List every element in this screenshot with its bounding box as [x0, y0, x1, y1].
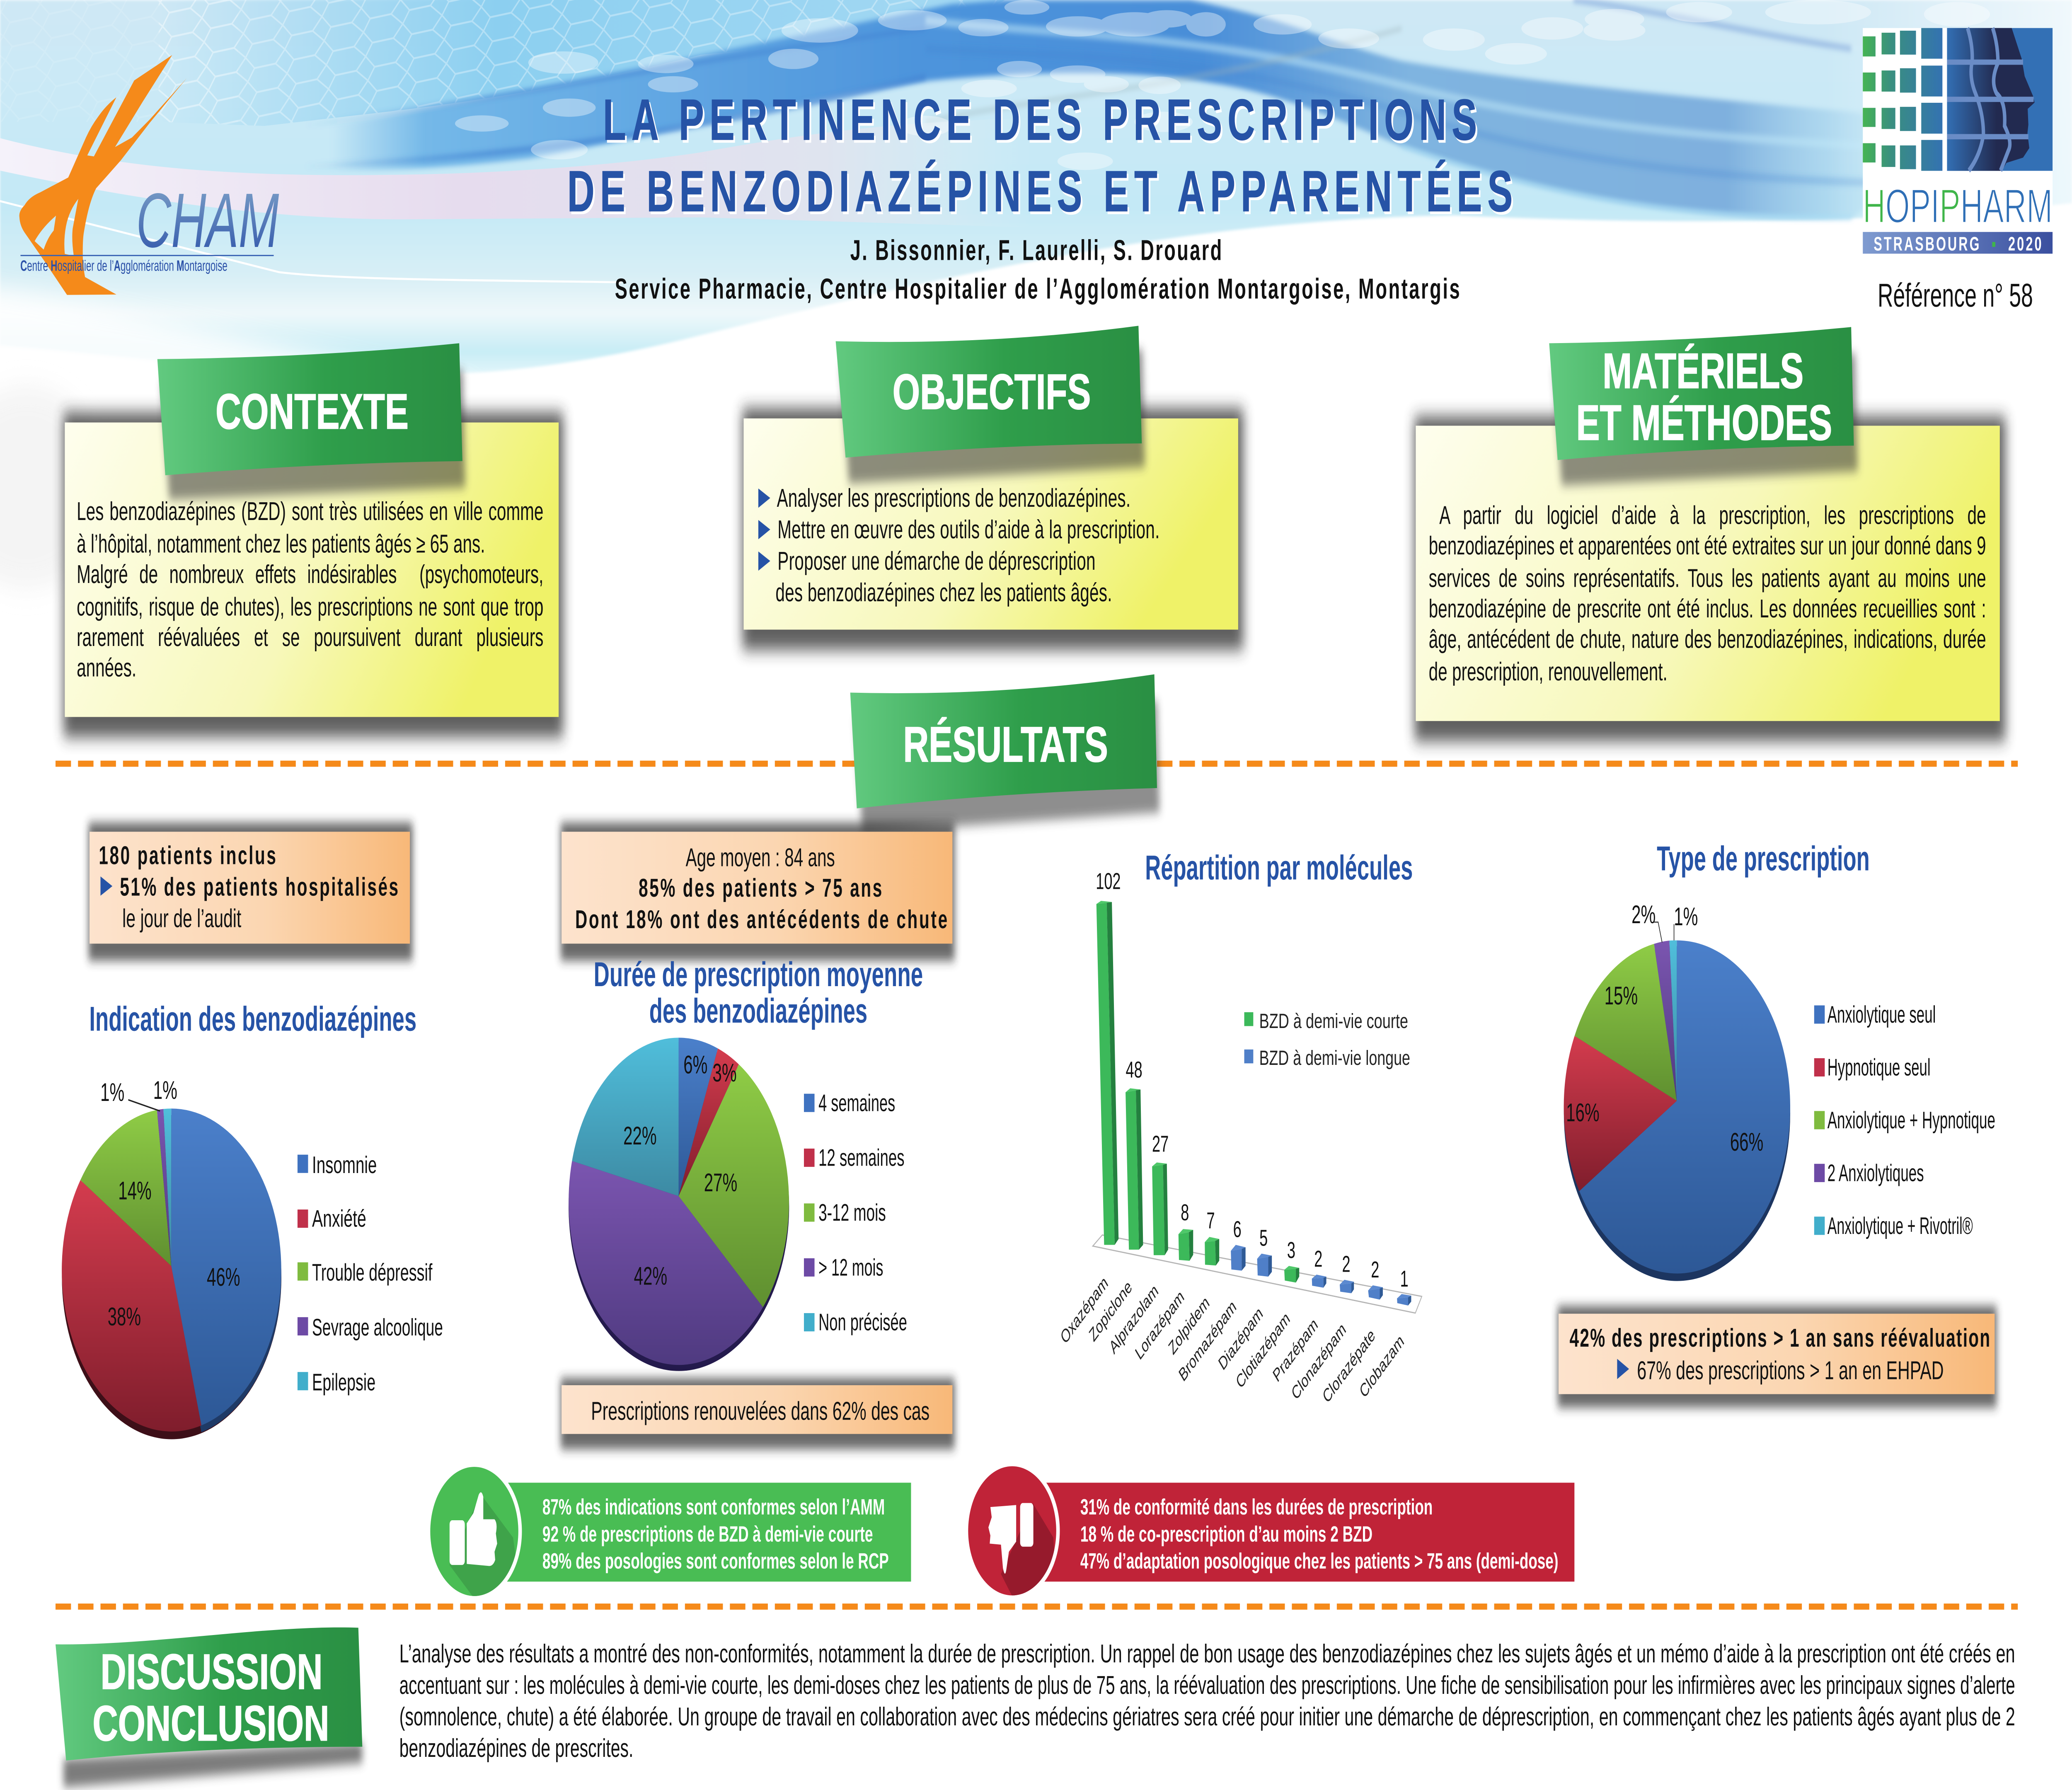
bullet list: Analyser les prescriptions de benzodiazépines.: [777, 484, 1130, 513]
pie labels: 22%: [623, 1122, 657, 1151]
icon: gradient squares: [1863, 28, 1942, 171]
legend: type: Anxiolytique seul: [1828, 1000, 1936, 1029]
pie labels: 14%: [118, 1177, 152, 1205]
bar chart: repartition par molecules: [1058, 868, 1422, 1407]
pie labels: 15%: [1605, 982, 1638, 1011]
authors: [615, 236, 1460, 307]
slice: anxiolytique seul 66%: [1579, 941, 1790, 1273]
callout: patients inclus: le jour de l’audit: [122, 905, 242, 933]
legend: indication: Trouble dépressif: [312, 1258, 433, 1287]
body text: Les benzodiazépines (BZD) sont très utilisées en ville comme: [77, 498, 543, 527]
legend: duree: Non précisée: [818, 1308, 908, 1336]
bar values: 2: [1371, 1257, 1379, 1282]
chart title: duree de prescription: des benzodiazépines: [649, 992, 867, 1031]
pie chart: duree de prescription: [569, 1038, 789, 1371]
bar values: 5: [1259, 1225, 1268, 1251]
pie labels: [1566, 901, 1763, 1157]
pie chart: type de prescription: [1564, 901, 1790, 1281]
callout: points negatifs: [965, 1462, 1574, 1604]
axis labels: Diazépam: [1215, 1302, 1265, 1374]
bar values: 27: [1152, 1131, 1169, 1157]
text: 31% de conformité dans les durées de prescription: [1080, 1496, 1433, 1521]
legend: type: Anxiolytique + Rivotril®: [1828, 1212, 1973, 1240]
slice: 2 anxiolytiques 2%: [1654, 941, 1677, 1101]
title: DE BENZODIAZÉPINES ET APPARENTÉES: [567, 158, 1513, 225]
bars: [1097, 901, 1411, 1306]
callout: prescriptions sans reevaluation: 42% des prescriptions > 1 an sans réévaluation: [1569, 1324, 1990, 1353]
axis labels: Alprazolam: [1106, 1280, 1161, 1358]
pie labels: 16%: [1566, 1099, 1600, 1127]
callout: age moyen: Dont 18% ont des antécédents de chute: [575, 906, 947, 934]
slice: 3-12 mois 27%: [679, 1064, 789, 1307]
bar values: 8: [1181, 1200, 1189, 1226]
slice: hypnotique seul 16%: [1564, 1036, 1677, 1191]
text: [1080, 1496, 1559, 1575]
callout: age moyen: 85% des patients > 75 ans: [639, 874, 882, 903]
panel: materiels et methodes: [1414, 327, 2006, 741]
axis labels: Prazépam: [1270, 1313, 1320, 1386]
authors: Service Pharmacie, Centre Hospitalier de l’Agglomération Montargoise, Montargis: [615, 274, 1460, 307]
bullet list: des benzodiazépines chez les patients âgés.: [775, 579, 1112, 607]
axis labels: [1058, 1272, 1406, 1407]
legend: duree: 12 semaines: [818, 1144, 905, 1172]
bar values: 2: [1342, 1251, 1351, 1277]
body text: A partir du logiciel d’aide à la prescription, les prescriptions de: [1439, 501, 1986, 530]
text: 18 % de co-prescription d’au moins 2 BZD: [1080, 1523, 1372, 1548]
slice: anxiolytique + rivotril 1%: [1669, 941, 1677, 1101]
pie labels: 3%: [713, 1059, 737, 1088]
pie labels: 6%: [683, 1051, 707, 1079]
chart title: type de prescription: Type de prescription: [1657, 840, 1870, 878]
ribbon heading: [157, 343, 465, 500]
logo subtitle: Centre Hospitalier de l’Agglomération Montargoise: [20, 256, 228, 275]
axis labels: Clobazam: [1357, 1330, 1406, 1402]
axis labels: Bromazépam: [1176, 1296, 1239, 1386]
text: 92 % de prescriptions de BZD à demi-vie courte: [542, 1523, 873, 1548]
chart title: duree de prescription: [594, 955, 923, 1031]
callout: patients inclus: 51% des patients hospitalisés: [120, 873, 398, 902]
heading: resultats: RÉSULTATS: [903, 717, 1108, 774]
background: header waves: [0, 0, 2072, 589]
axis labels: Clotiazépam: [1233, 1308, 1293, 1393]
pie labels: 66%: [1730, 1128, 1763, 1157]
pie labels: 1%: [1674, 903, 1698, 931]
legend: BZD à demi-vie courte: [1259, 1010, 1408, 1033]
bar values: 48: [1126, 1057, 1143, 1083]
chart title: duree de prescription: Durée de prescription moyenne: [594, 955, 923, 994]
callout: patients inclus: 180 patients inclus: [99, 842, 276, 870]
text block: discussion: accentuant sur : les molécules à demi-vie courte, les demi-doses chez les patients de plus de 75 ans, la réévaluation des prescriptions. Une fiche de sensibilisation pour les infirmières avec les principaux signes d’alerte: [399, 1671, 2015, 1700]
chart title: repartition par molecules: Répartition par molécules: [1145, 849, 1413, 888]
callout: age moyen: [561, 822, 955, 961]
text block: discussion: (somnolence, chute) a été élaborée. Un groupe de travail en collaboration avec des médecins gériatres sera créé pour initier une démarche de déprescription, en commençant chez les patients âgés ayant plus de 2: [399, 1703, 2015, 1732]
legend: [1244, 1010, 1410, 1070]
heading: discussion conclusion: CONCLUSION: [92, 1698, 329, 1753]
legend: indication: Sevrage alcoolique: [312, 1313, 443, 1342]
slice: non precisee 22%: [572, 1038, 679, 1196]
icon: thumbs down: [988, 1503, 1058, 1604]
icon: orange flame: [19, 55, 187, 295]
legend: duree: [804, 1089, 908, 1336]
icon: thumbs up: [449, 1492, 516, 1596]
bar values: 7: [1207, 1208, 1215, 1234]
body text: [77, 498, 543, 692]
legend: type: Anxiolytique + Hypnotique: [1828, 1106, 1996, 1134]
callout: age moyen: Age moyen : 84 ans: [686, 844, 835, 872]
bar values: 6: [1233, 1217, 1242, 1242]
callout: patients inclus: [89, 822, 413, 961]
logo wordmark: HOPIPHARM: [1863, 182, 2053, 235]
body text: benzodiazépines et apparentées ont été extraites sur un jour donné dans 9: [1429, 532, 1986, 561]
axis labels: Clonazépam: [1289, 1318, 1348, 1404]
ribbon heading: ET MÉTHODES: [1576, 395, 1832, 452]
title: LA PERTINENCE DES PRESCRIPTIONS: [603, 89, 1477, 154]
slice: epilepsie 1%: [163, 1108, 171, 1266]
text: 89% des posologies sont conformes selon le RCP: [542, 1551, 889, 1575]
axis labels: Zolpidem: [1166, 1292, 1212, 1359]
body text: benzodiazépine de prescrite ont été inclus. Les données recueillies sont :: [1429, 595, 1986, 623]
bullet list: Proposer une démarche de déprescription: [777, 547, 1096, 576]
pie labels: 27%: [704, 1169, 737, 1197]
chart title: indication: Indication des benzodiazépines: [89, 1000, 416, 1039]
authors: J. Bissonnier, F. Laurelli, S. Drouard: [850, 236, 1222, 268]
legend: indication: [298, 1151, 443, 1396]
ribbon heading: OBJECTIFS: [893, 366, 1091, 421]
callout: prescriptions renouvelees: Prescriptions renouvelées dans 62% des cas: [591, 1397, 929, 1426]
callout: points positifs: [427, 1462, 911, 1604]
logo: CHAM: [19, 55, 279, 295]
legend: indication: Epilepsie: [312, 1368, 376, 1396]
pie labels: 38%: [108, 1303, 141, 1331]
bullet list: Mettre en œuvre des outils d’aide à la prescription.: [777, 516, 1159, 544]
axis labels: Lorazépam: [1133, 1286, 1186, 1364]
ribbon heading: [836, 326, 1145, 484]
slice: plus de 12 mois 42%: [569, 1161, 763, 1365]
logo: Hopipharm: [1863, 28, 2053, 256]
logo wordmark: CHAM: [136, 180, 279, 265]
bar values: [1096, 868, 1409, 1292]
text: 47% d’adaptation posologique chez les patients > 75 ans (demi-dose): [1080, 1551, 1559, 1575]
body text: rarement réévaluées et se poursuivent durant plusieurs: [77, 624, 543, 652]
legend: type: Hypnotique seul: [1828, 1053, 1931, 1081]
pie labels: [623, 1051, 737, 1291]
heading: discussion conclusion: [56, 1628, 362, 1788]
heading: discussion conclusion: DISCUSSION: [101, 1646, 323, 1701]
divider lines: [56, 764, 2018, 1606]
panel: contexte: [63, 343, 563, 737]
bar values: 2: [1314, 1246, 1322, 1272]
slice: 4 semaines 6%: [679, 1038, 718, 1196]
ribbon heading: CONTEXTE: [215, 386, 409, 441]
slice: trouble depressif 14%: [80, 1110, 171, 1266]
pie labels: 1%: [100, 1079, 124, 1107]
body text: années.: [77, 655, 136, 683]
bar values: 3: [1287, 1237, 1295, 1263]
text block: discussion: [399, 1640, 2015, 1763]
body text: à l’hôpital, notamment chez les patients âgés ≥ 65 ans.: [77, 530, 485, 558]
pie labels: 1%: [153, 1076, 177, 1105]
legend: type: 2 Anxiolytiques: [1828, 1159, 1924, 1187]
pie labels: [100, 1076, 240, 1331]
reference number: Référence n° 58: [1878, 278, 2033, 315]
pie chart: indication des benzodiazepines: [62, 1076, 281, 1439]
legend: indication: Insomnie: [312, 1151, 378, 1179]
slice: 12 semaines 3%: [679, 1048, 739, 1196]
logo banner: STRASBOURG ▪ 2020: [1874, 234, 2042, 256]
ribbon heading: MATÉRIELS: [1602, 343, 1803, 400]
body text: [1429, 501, 1986, 694]
slice: anxiolytique + hypnotique 15%: [1575, 944, 1677, 1101]
slice: anxiete 38%: [62, 1180, 201, 1432]
text block: discussion: L’analyse des résultats a montré des non-conformités, notamment la durée de prescription. Un rappel de bon usage des benzodiazépines chez les sujets âgés et un mémo d’aide à la prescription ont été créés en: [399, 1640, 2015, 1669]
legend: type: [1814, 1000, 1996, 1240]
axis labels: Clorazépate: [1320, 1324, 1377, 1407]
title: [567, 89, 1513, 225]
ribbon heading: [1549, 327, 1858, 486]
panel: objectifs: [742, 326, 1244, 650]
pie labels: 42%: [634, 1262, 667, 1291]
text: [542, 1496, 889, 1575]
pie labels: 46%: [207, 1263, 240, 1292]
legend: duree: 4 semaines: [818, 1089, 895, 1117]
legend: indication: Anxiété: [312, 1205, 367, 1233]
bar values: 102: [1096, 868, 1121, 894]
body text: cognitifs, risque de chutes), les prescriptions ne sont que trop: [77, 592, 543, 621]
axis labels: Oxazépam: [1058, 1272, 1111, 1348]
callout: prescriptions renouvelees: [561, 1378, 955, 1449]
axis labels: Zopiclone: [1086, 1276, 1135, 1345]
slice: sevrage 1%: [157, 1109, 171, 1266]
icon: face profile: [1947, 28, 2053, 171]
bar values: 1: [1400, 1266, 1409, 1292]
legend: BZD à demi-vie longue: [1259, 1047, 1410, 1070]
legend: duree: 3-12 mois: [818, 1198, 886, 1227]
body text: de prescription, renouvellement.: [1429, 658, 1668, 686]
callout: prescriptions sans reevaluation: [1558, 1306, 1997, 1408]
legend: duree: > 12 mois: [818, 1253, 884, 1282]
slice: insomnie 46%: [171, 1108, 281, 1425]
pie labels: 2%: [1631, 901, 1656, 929]
body text: services de soins représentatifs. Tous les patients ayant au moins une: [1429, 564, 1986, 592]
body text: âge, antécédent de chute, nature des benzodiazépines, indications, durée: [1429, 626, 1986, 655]
text: 87% des indications sont conformes selon l’AMM: [542, 1496, 885, 1521]
text block: discussion: benzodiazépines de prescrites.: [399, 1734, 633, 1763]
bullet list: [758, 484, 1159, 607]
heading: resultats: [850, 674, 1159, 833]
body text: Malgré de nombreux effets indésirables (psychomoteurs,: [77, 561, 543, 590]
callout: prescriptions sans reevaluation: 67% des prescriptions > 1 an en EHPAD: [1637, 1357, 1944, 1385]
